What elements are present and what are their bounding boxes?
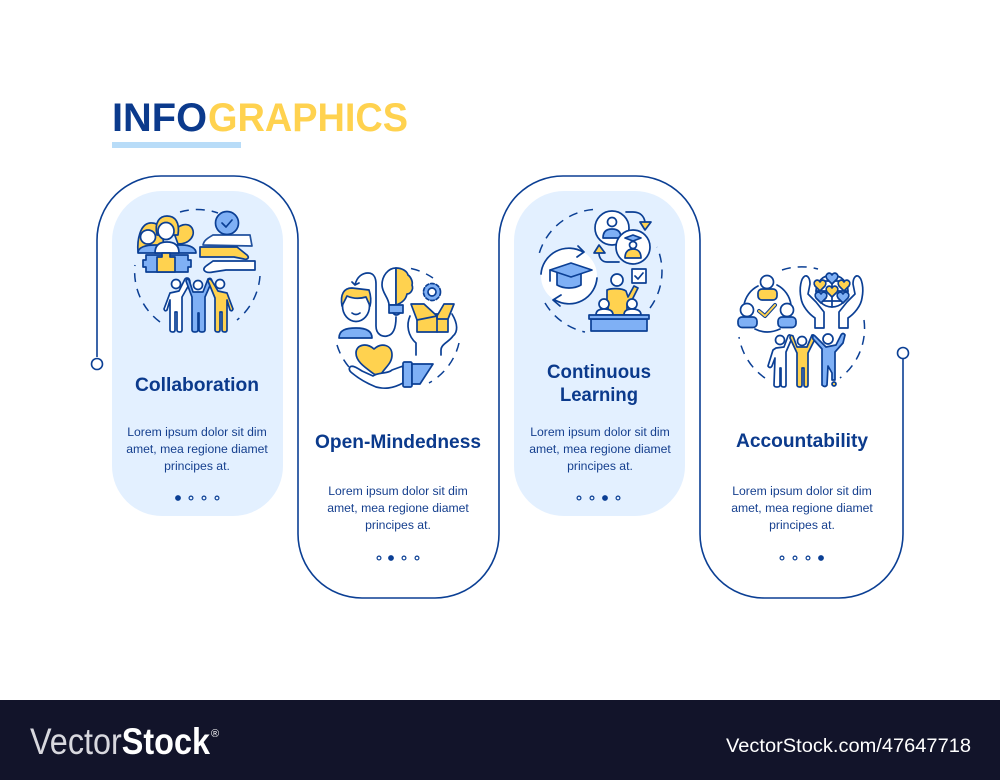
connector line with arrow (352, 273, 396, 336)
student and graduate circles (595, 211, 650, 264)
pagination dots: step 1 (176, 496, 219, 500)
text block: open-mindedness: principes at. (365, 518, 431, 532)
text block: continuous learning: Lorem ipsum dolor sit dim (530, 425, 670, 439)
graduation cap in cycle (541, 246, 597, 306)
heading: continuous learning: Learning (560, 385, 638, 406)
text block: open-mindedness: amet, mea regione diamet (327, 501, 469, 515)
panel: collaboration background (112, 191, 283, 516)
footer image id: VectorStock.com/47647718 (726, 736, 971, 757)
puzzle pieces (143, 253, 191, 272)
footer logo: VectorStock (30, 721, 210, 762)
heading: accountability: Accountability (736, 431, 868, 452)
text block: collaboration: principes at. (164, 459, 230, 473)
gear (424, 284, 440, 300)
person bust (339, 288, 372, 338)
open box (411, 304, 454, 332)
icon: collaboration (135, 210, 260, 332)
text block: collaboration: Lorem ipsum dolor sit dim (127, 425, 267, 439)
heading: open-mindedness: Open-Mindedness (315, 432, 481, 453)
text block: collaboration: amet, mea regione diamet (126, 442, 268, 456)
clasped hands (200, 235, 255, 272)
light bulb with brain (382, 268, 413, 315)
text block: continuous learning: amet, mea regione diamet (529, 442, 671, 456)
footer band (0, 700, 1000, 780)
head profile (408, 314, 457, 355)
icon: accountability (738, 267, 865, 387)
heart in hand (349, 345, 433, 388)
text block: accountability: principes at. (769, 518, 835, 532)
team with check (738, 276, 796, 332)
title underline (112, 142, 241, 148)
teacher and students at desk (589, 274, 649, 331)
panel: continuous learning background (514, 191, 685, 516)
three people with raised hands (164, 278, 233, 332)
cycle arrows (594, 212, 651, 262)
text block: open-mindedness: Lorem ipsum dolor sit dim (328, 484, 468, 498)
pagination dots: step 3 (577, 496, 620, 500)
text block: accountability: Lorem ipsum dolor sit dim (732, 484, 872, 498)
text block: continuous learning: principes at. (567, 459, 633, 473)
title: INFO (112, 96, 207, 140)
pagination dots: step 4 (780, 556, 823, 560)
icon: open-mindedness (337, 268, 459, 388)
hands holding globe of hearts (800, 273, 863, 328)
connecting timeline outline (92, 176, 908, 598)
check badge (216, 212, 238, 234)
icon: continuous learning (538, 210, 662, 332)
registered mark: ® (211, 728, 219, 740)
pagination dots: step 2 (377, 556, 419, 560)
three people cheering (768, 334, 845, 387)
heading: continuous learning: Continuous (547, 362, 651, 383)
team heads and shoulders (138, 216, 196, 253)
text block: accountability: amet, mea regione diamet (731, 501, 873, 515)
heading: collaboration: Collaboration (135, 375, 259, 396)
checkbox (632, 269, 646, 283)
title: GRAPHICS (208, 96, 408, 140)
